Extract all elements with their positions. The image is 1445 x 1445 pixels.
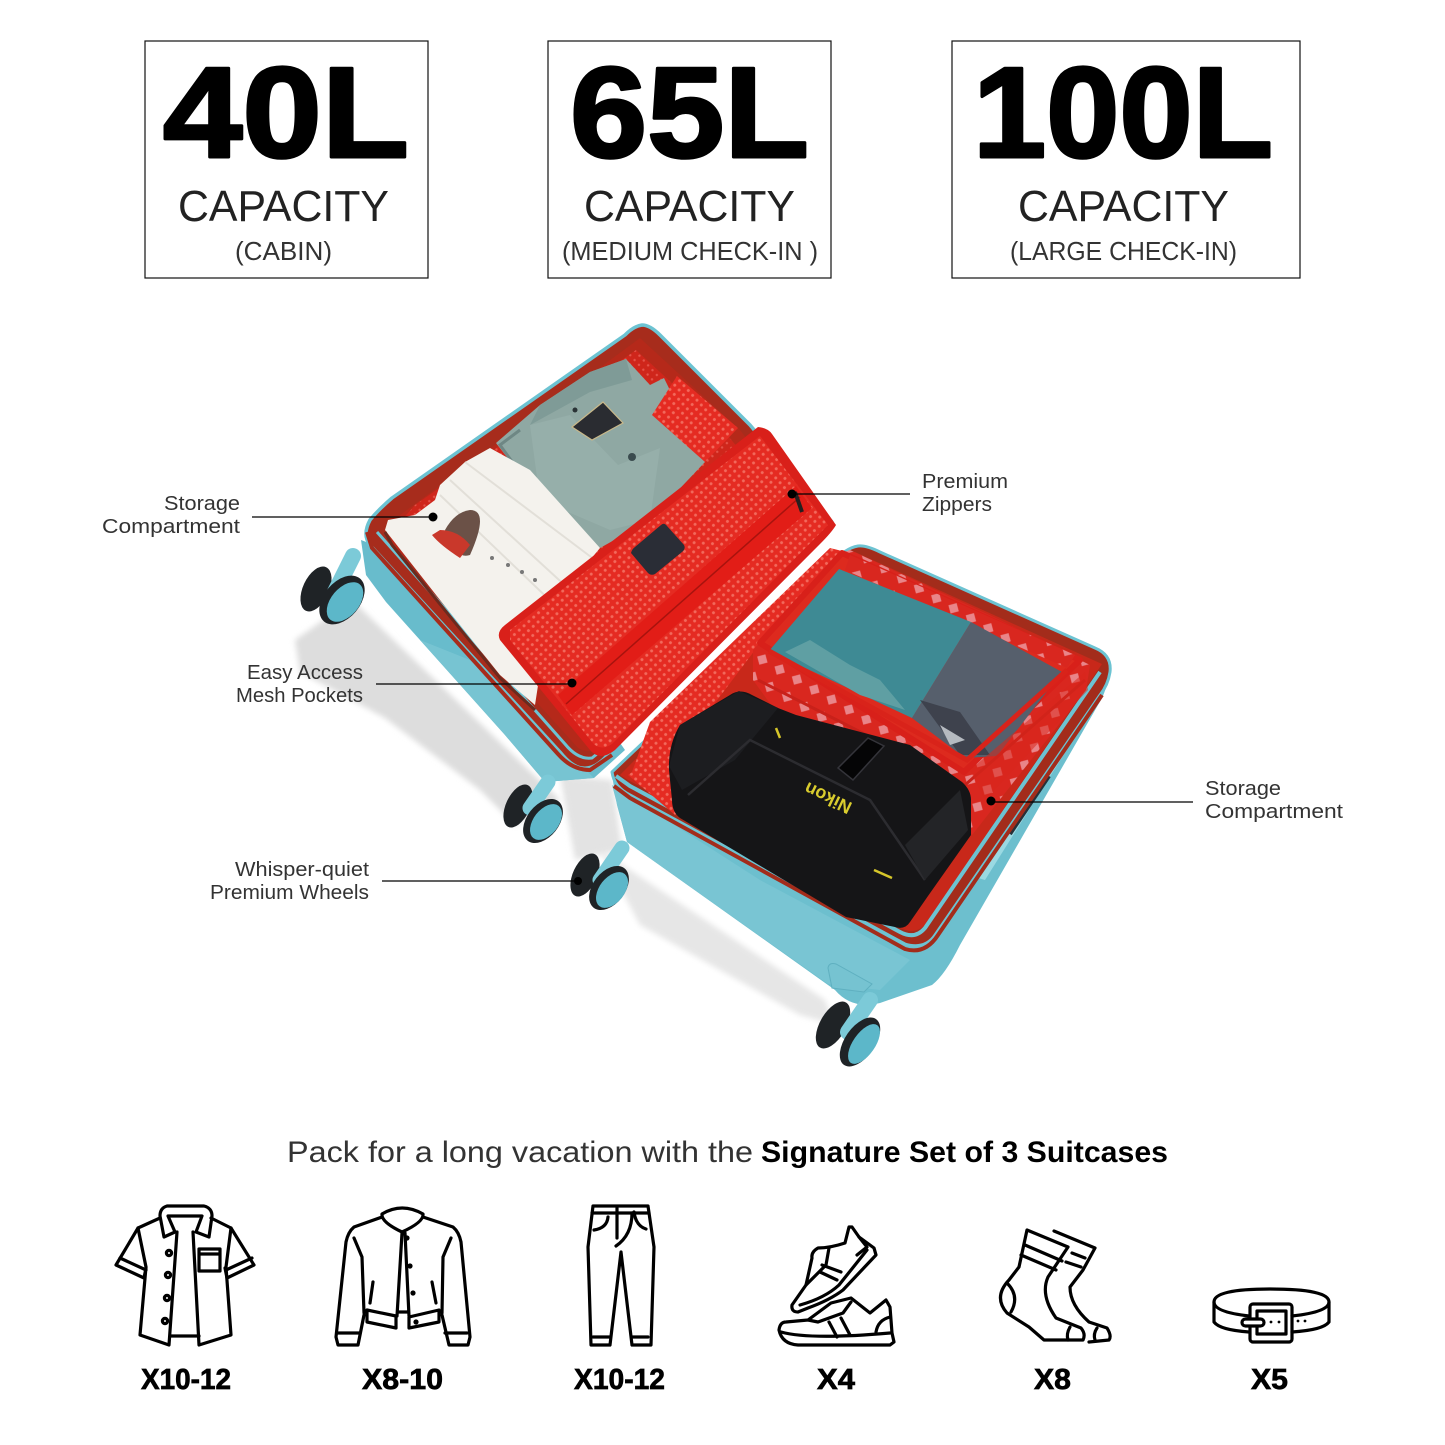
item: trousers: X10-12 [574, 1364, 665, 1396]
capacity box: 65L: CAPACITY [584, 182, 795, 231]
callout: storage compartment right [986, 778, 1344, 823]
shirt label [572, 402, 623, 440]
upper zip pouch [652, 376, 738, 462]
zipper band [558, 486, 812, 715]
lid shell, left half [361, 325, 832, 782]
item: shirts [116, 1206, 254, 1396]
callout: mesh pockets [236, 662, 576, 707]
item: socks: X8 [1034, 1364, 1071, 1396]
callout: premium wheels: Premium Wheels [210, 882, 369, 904]
folded shirt [496, 359, 705, 548]
capacity box: 100L [952, 41, 1300, 278]
icon: trousers [588, 1206, 654, 1345]
right half rim [612, 546, 1110, 950]
callout: premium wheels: Whisper-quiet [235, 859, 369, 881]
capacity box: 65L: (MEDIUM CHECK-IN ) [562, 236, 818, 266]
wheel: rear right [564, 848, 637, 918]
item: shoes: X4 [817, 1364, 855, 1396]
capacity box: 100L: (LARGE CHECK-IN) [1010, 236, 1237, 266]
mesh organiser flap [499, 427, 836, 756]
icon: belt [1214, 1289, 1329, 1342]
icon: jacket [336, 1208, 470, 1345]
capacity box: 40L: CAPACITY [178, 182, 389, 231]
capacity box: 40L [145, 41, 428, 278]
callout: premium zippers: Zippers [922, 494, 992, 516]
zipper pull [795, 492, 802, 512]
item: trousers [574, 1206, 665, 1396]
buckle [838, 738, 884, 780]
black camera bag [669, 691, 971, 928]
capacity box: 40L: 40L [163, 41, 409, 185]
item: jackets: X8-10 [362, 1364, 443, 1396]
callout: premium wheels [210, 859, 582, 904]
right half body [612, 665, 1110, 1005]
item: socks [1000, 1230, 1110, 1396]
towel in window [769, 569, 971, 718]
capacity box: 100L: 100L [973, 41, 1273, 185]
floor shadows [295, 600, 835, 1025]
icon: shoes [779, 1227, 894, 1345]
capacity box: 40L: (CABIN) [235, 236, 332, 266]
item: belts: X5 [1251, 1364, 1288, 1396]
callout: storage compartment right: Compartment [1205, 801, 1344, 823]
icon: shirt [116, 1206, 254, 1345]
packing heading: Signature Set of 3 Suitcases [761, 1136, 1168, 1169]
white sneaker [385, 448, 600, 710]
packing heading [287, 1136, 1168, 1169]
packing heading: Pack for a long vacation with the [287, 1136, 753, 1169]
brand text: Nikon [801, 778, 855, 818]
item: shirts: X10-12 [141, 1364, 231, 1396]
item: jackets [336, 1208, 470, 1396]
wheel: rear left [294, 556, 374, 633]
wheel: front left [497, 780, 571, 851]
capacity box: 100L: CAPACITY [1018, 182, 1229, 231]
packing cube [753, 550, 1090, 835]
capacity box: 65L: 65L [570, 41, 809, 185]
item: belts [1214, 1289, 1329, 1396]
suitcase illustration [294, 325, 1110, 1074]
capacity box: 65L [548, 41, 831, 278]
leather patch [631, 524, 685, 575]
callout: storage compartment left [102, 493, 438, 538]
callout: mesh pockets: Mesh Pockets [236, 685, 363, 707]
callout: premium zippers [788, 471, 1008, 516]
callout: storage compartment right: Storage [1205, 778, 1281, 800]
callout: storage compartment left: Storage [164, 493, 240, 515]
icon: socks [1000, 1230, 1110, 1342]
item: shoes [779, 1227, 894, 1396]
grey clothes in window [912, 622, 1062, 758]
callout: mesh pockets: Easy Access [247, 662, 363, 684]
wheel: front right [809, 996, 888, 1074]
callout: storage compartment left: Compartment [102, 516, 241, 538]
callout: premium zippers: Premium [922, 471, 1008, 493]
side handle [1010, 776, 1049, 834]
